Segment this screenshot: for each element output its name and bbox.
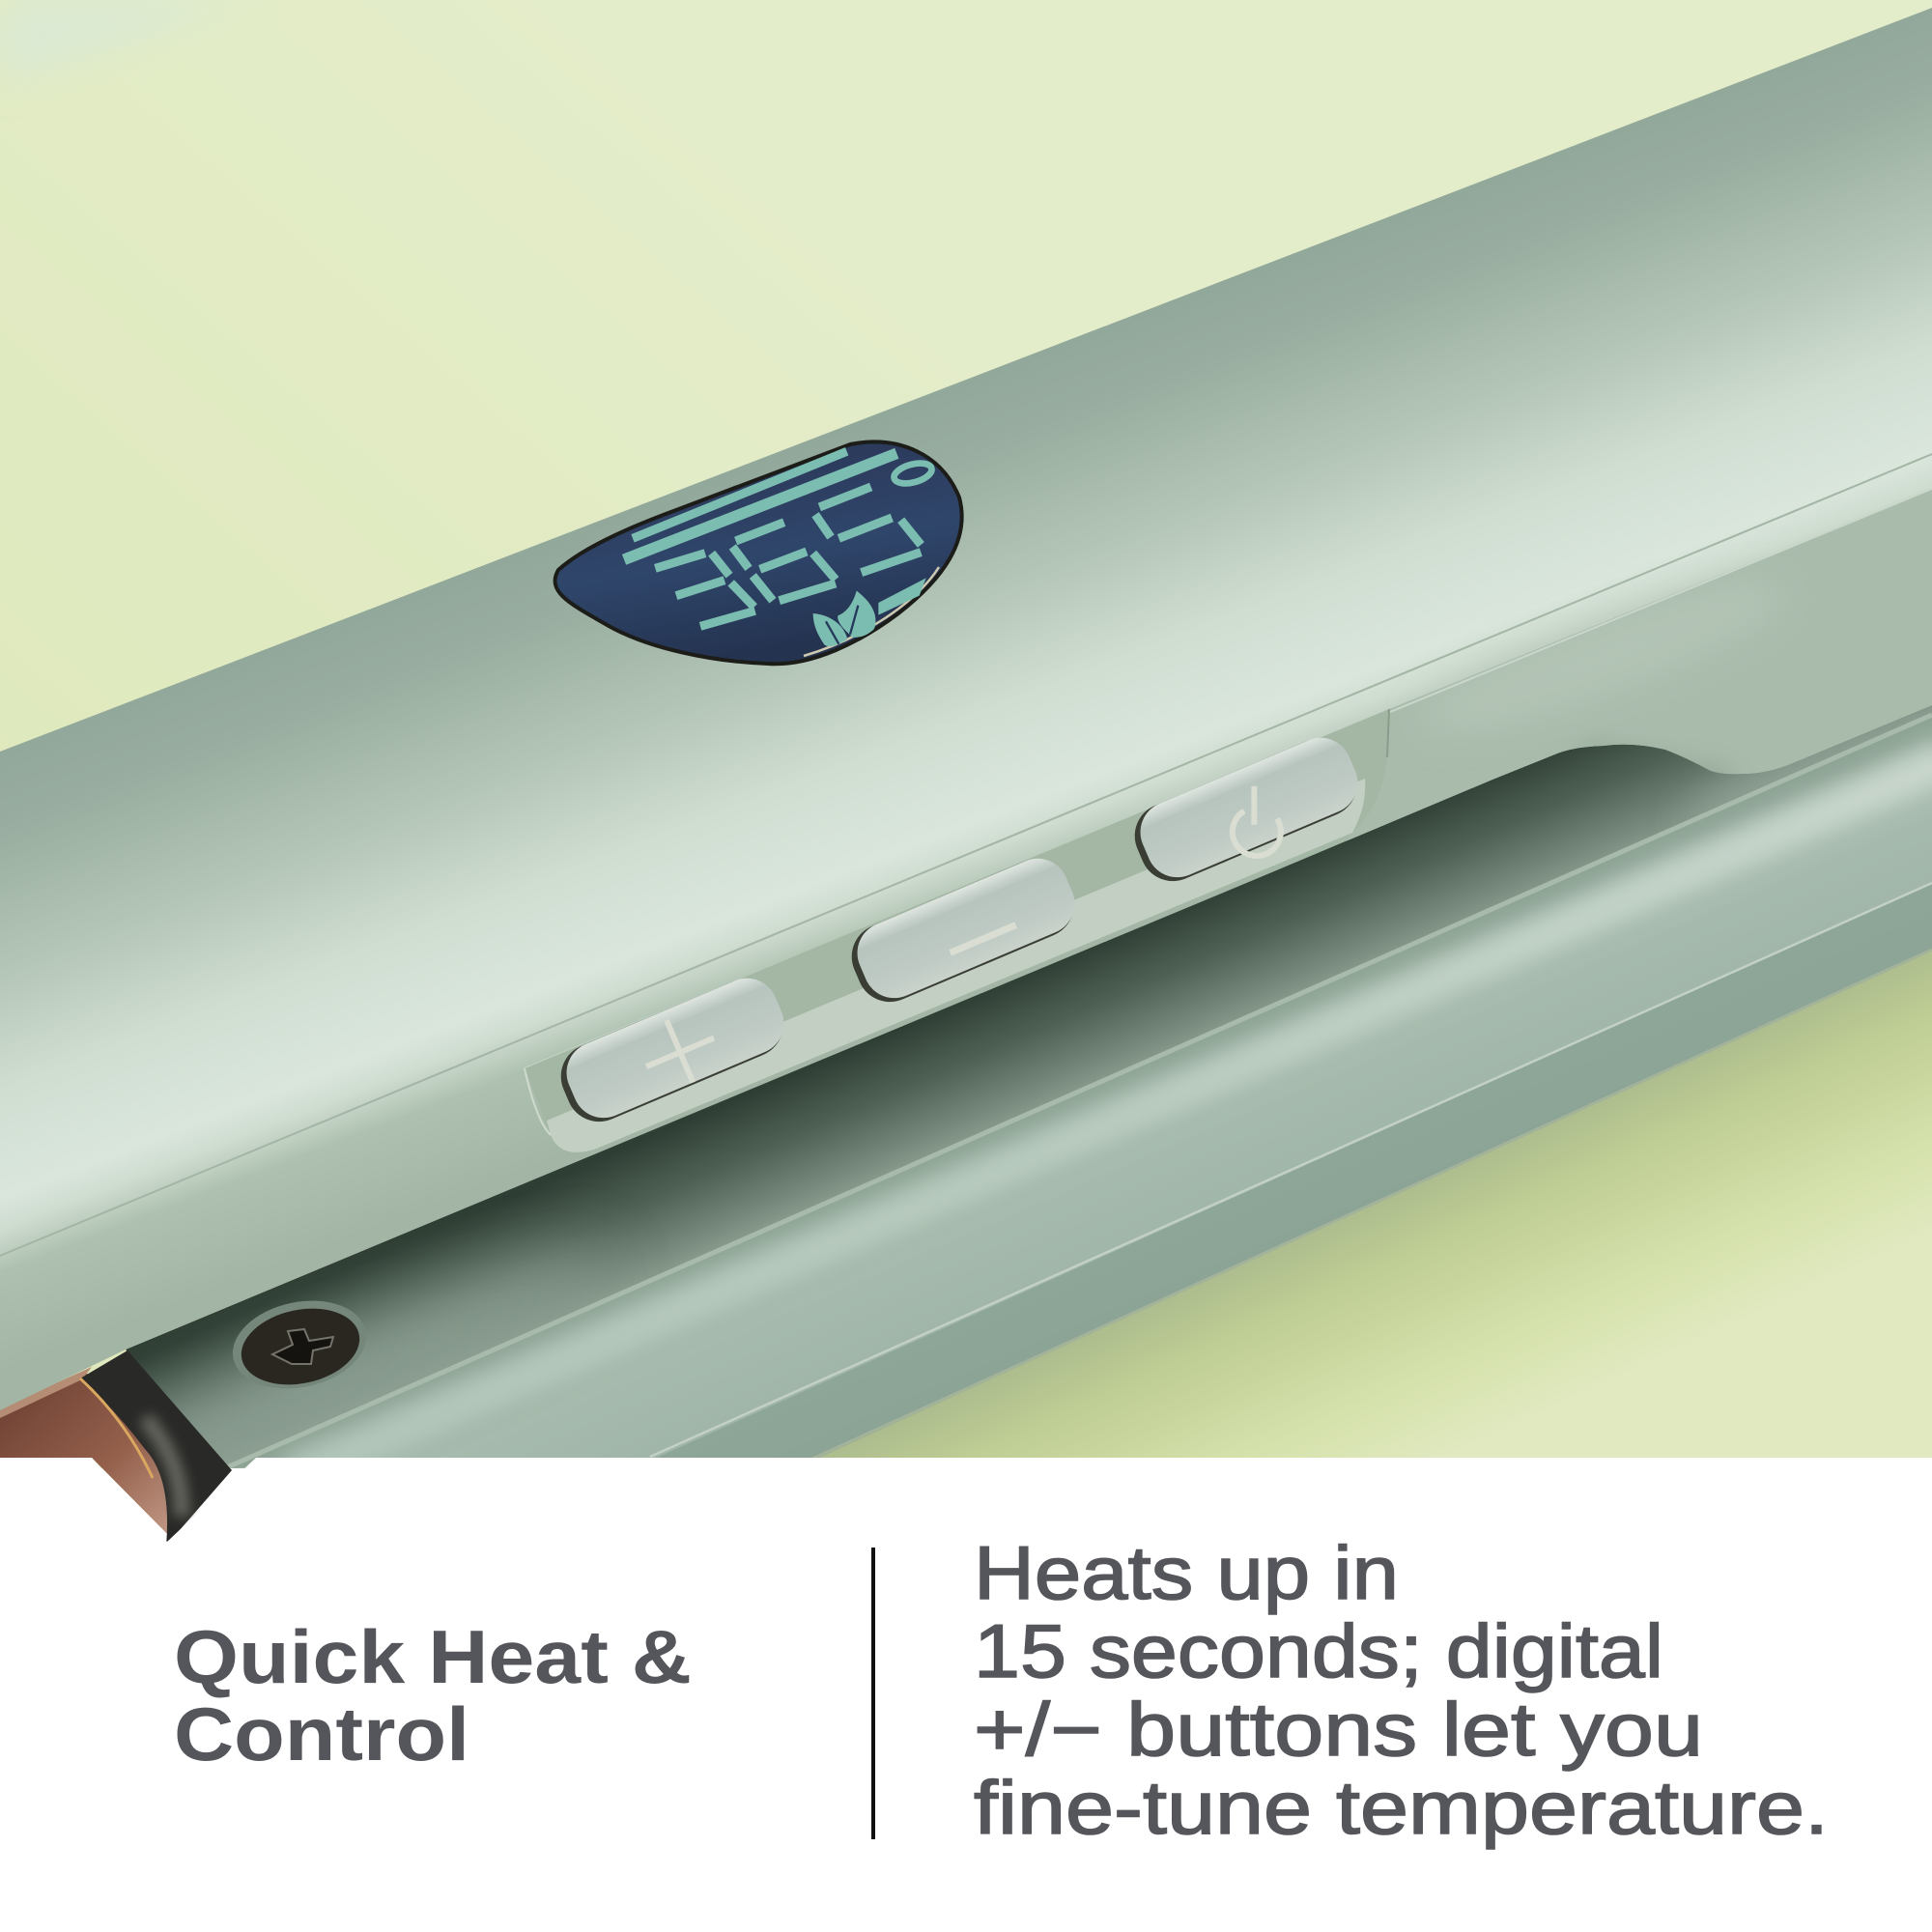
body text xyxy=(974,1530,1829,1850)
divider xyxy=(871,1548,875,1839)
digit 6 xyxy=(732,523,836,601)
background: pale green surface xyxy=(0,0,1932,1468)
ridge highlight xyxy=(225,715,1932,1468)
body text: +/− buttons let you xyxy=(974,1687,1703,1772)
digit 3 xyxy=(655,554,755,626)
white caption panel with notch xyxy=(0,1458,1932,1932)
minus button xyxy=(841,849,1085,1012)
power button xyxy=(1124,728,1375,906)
heading: Quick Heat & Control: Quick Heat & xyxy=(174,1614,692,1699)
button strip xyxy=(525,709,1389,1152)
body text: 15 seconds; digital xyxy=(974,1608,1663,1693)
LCD temperature display xyxy=(555,441,962,664)
seam lines xyxy=(0,454,1932,1256)
mounting screw xyxy=(224,1289,375,1401)
degree symbol xyxy=(892,460,934,487)
bars xyxy=(633,451,847,538)
heading: Quick Heat & Control: Control xyxy=(174,1691,469,1776)
digit 5 xyxy=(815,487,921,573)
black band xyxy=(80,1350,232,1546)
right panel beneath seam xyxy=(1343,489,1932,845)
upper arm of straightener xyxy=(0,8,1932,1410)
body text: fine-tune temperature. xyxy=(974,1765,1829,1850)
copper plate xyxy=(0,1367,184,1550)
lower arm of straightener xyxy=(225,715,1932,1478)
leaf icon xyxy=(813,578,926,646)
plus button xyxy=(551,969,794,1132)
body text: Heats up in xyxy=(974,1530,1399,1615)
heading: Quick Heat & Control xyxy=(174,1614,692,1776)
dark gap between arms xyxy=(126,705,1932,1468)
